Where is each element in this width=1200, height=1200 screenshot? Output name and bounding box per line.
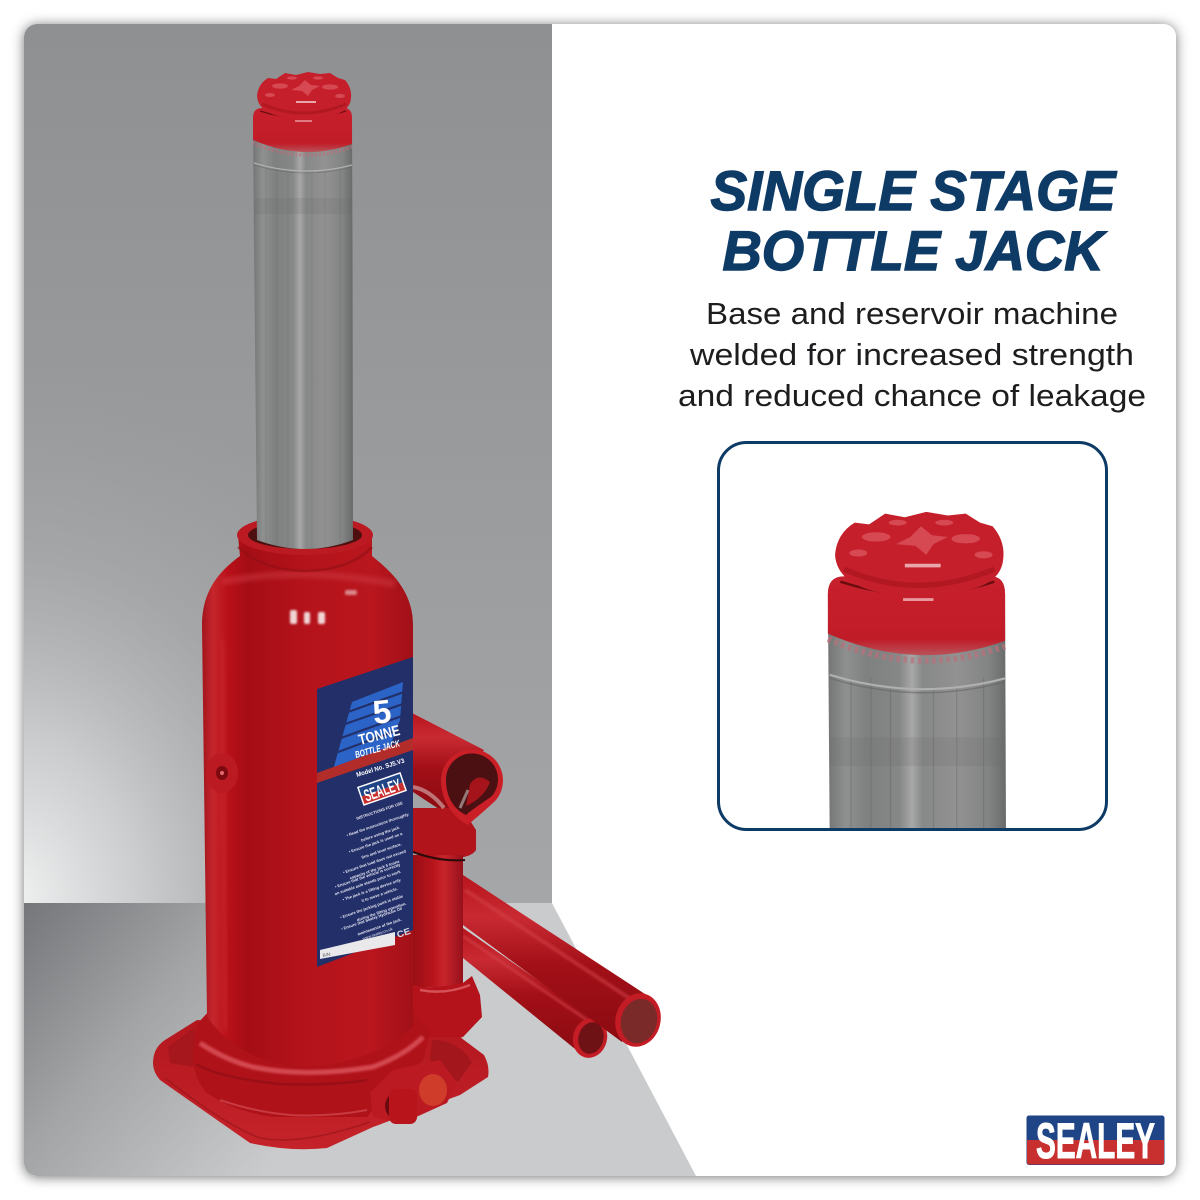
heading: [710, 159, 1117, 282]
product label: • Ensure the jack is used on a: [348, 831, 404, 854]
description text: and reduced chance of leakage: [678, 378, 1146, 413]
product label: firm and level surface.: [361, 841, 402, 860]
large handle tube: [463, 875, 667, 1052]
product label: it to move a vehicle.: [361, 886, 398, 903]
product label: • Ensure that the vehicle is correctly: [334, 862, 402, 889]
base plate: [153, 1020, 488, 1149]
product label: B/N:: [322, 951, 332, 958]
product label: maintenance of the jack.: [357, 917, 402, 937]
product label: • Ensure that load does not exceed: [342, 848, 407, 875]
product label: • The jack is a lifting device only: [342, 877, 402, 902]
release valve bolt: [370, 1060, 457, 1124]
image: bottle jack: [153, 72, 667, 1149]
heading: SINGLE STAGE: [710, 159, 1117, 222]
inset: ram saddle close-up: [718, 442, 1106, 830]
product label: capacity of the jack 5 tonne: [349, 858, 401, 880]
product label: • Ensure that Sealey Hydraulic Oil: [340, 906, 403, 931]
product label: www.sealey.co.uk: [362, 926, 393, 941]
product label: during the lifting operation.: [356, 901, 407, 922]
product label: on suitable axle stands prior to work: [334, 869, 402, 896]
product label: CE: [395, 926, 412, 940]
small handle tube: [463, 928, 612, 1062]
product label: TONNE: [357, 722, 402, 749]
description text: welded for increased strength: [689, 337, 1134, 372]
product label: Model No. SJ5.V3: [356, 757, 406, 779]
product label: [317, 657, 413, 967]
pump socket tube: [410, 712, 503, 987]
pump base: [413, 976, 482, 1050]
product label: BOTTLE JACK: [354, 738, 402, 761]
description text: Base and reservoir machine: [706, 296, 1118, 331]
heading: BOTTLE JACK: [722, 219, 1107, 282]
neck opening: [237, 515, 373, 555]
base ring: [193, 1010, 430, 1117]
side valve port: [206, 753, 238, 793]
product label: 5: [371, 692, 393, 731]
product label: • Ensure the jacking point is stable: [339, 893, 404, 920]
description text: [678, 296, 1146, 413]
product label: before using the jack.: [360, 825, 401, 843]
jack body: [202, 535, 413, 1067]
product label: • Read the instructions thoroughly: [346, 811, 410, 838]
panel: studio backdrop: [24, 24, 696, 1176]
product label: SEALEY: [361, 775, 404, 806]
product label: INSTRUCTIONS FOR USE: [356, 800, 404, 821]
ram and cap: [253, 72, 353, 549]
